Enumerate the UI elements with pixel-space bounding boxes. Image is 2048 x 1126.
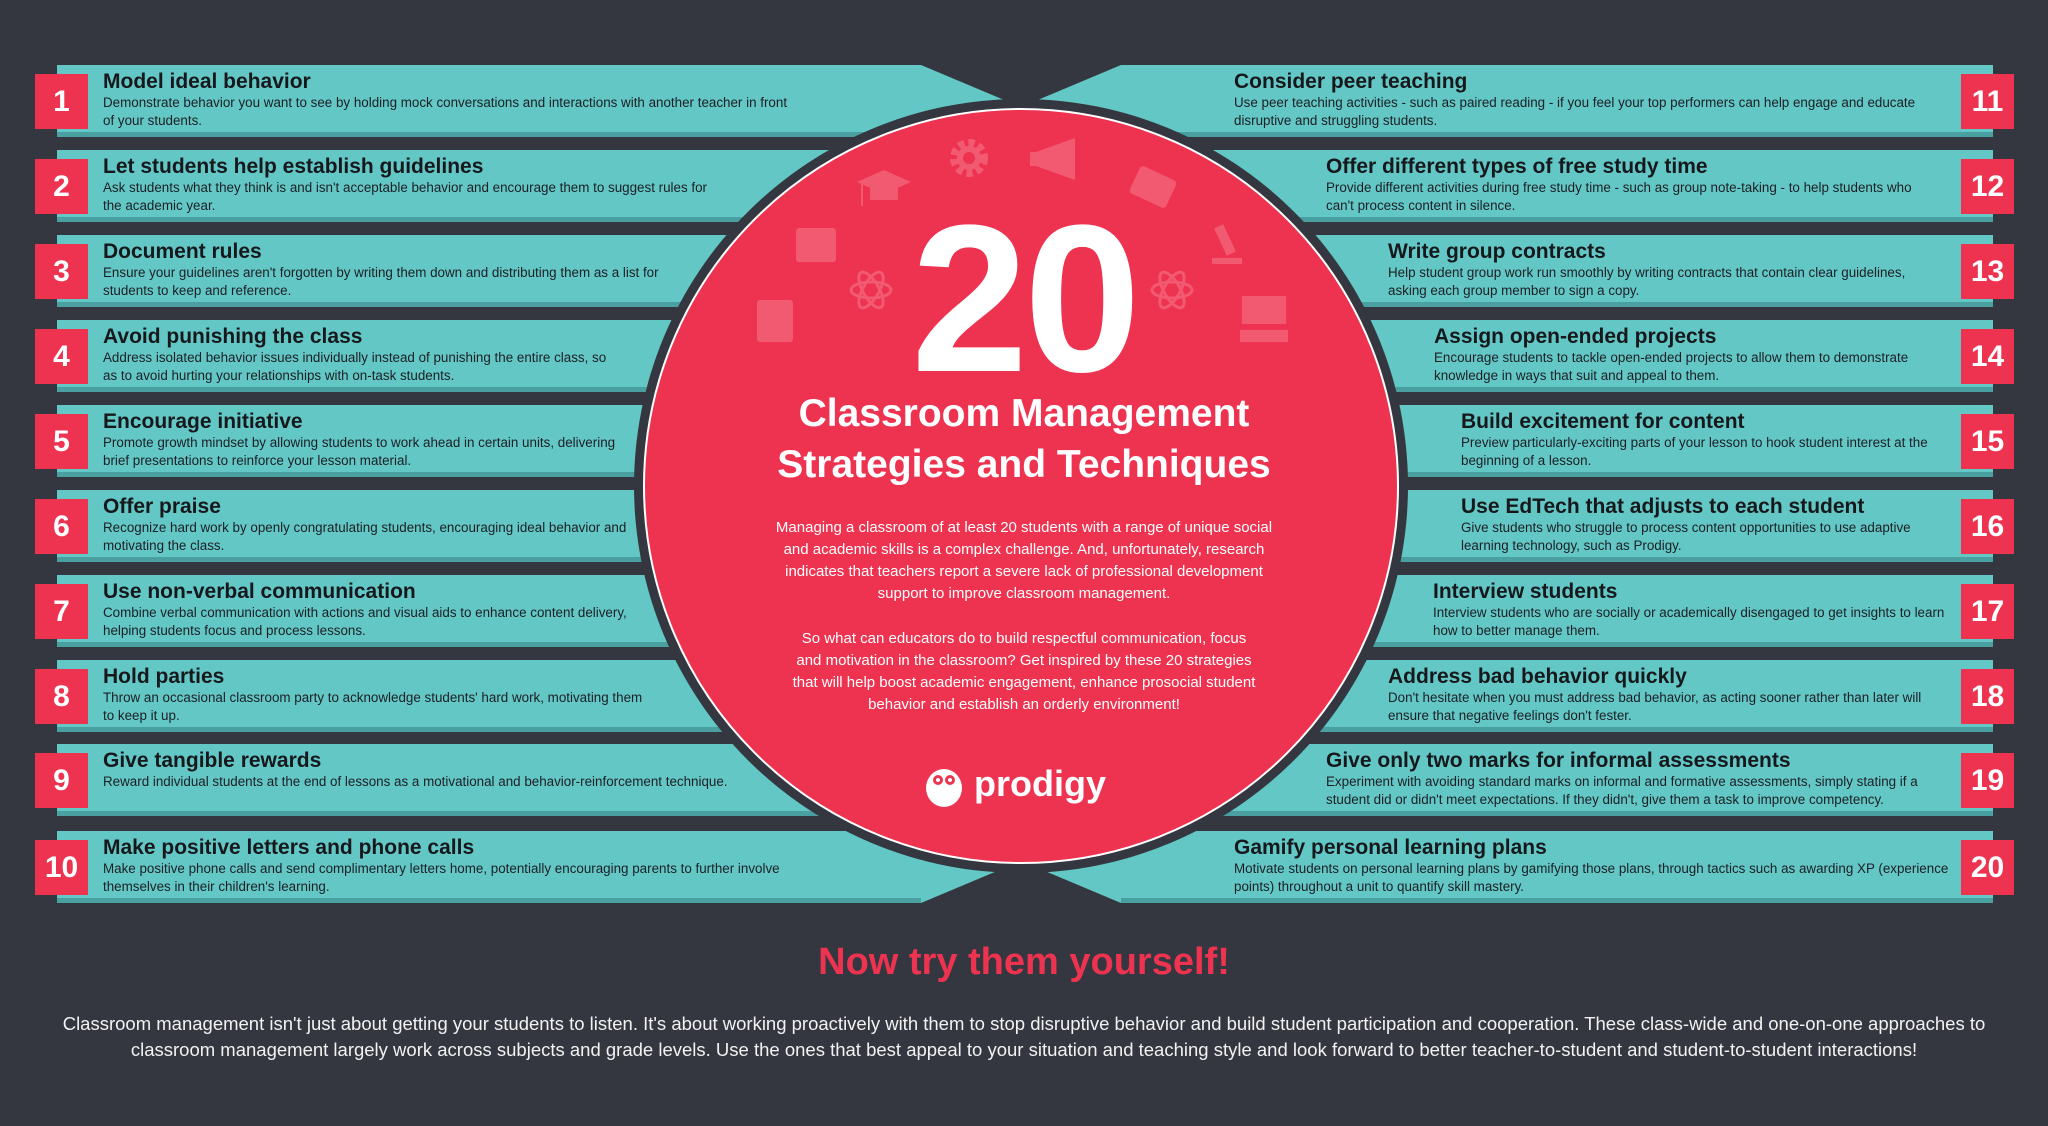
left item 6 <box>35 495 626 554</box>
right item 19 <box>1326 749 2014 808</box>
right item 12: Offer different types of free study time <box>1326 155 1708 178</box>
right item 14: Encourage students to tackle open-ended projects to allow them to demonstrate <box>1434 350 1908 365</box>
left item 8 <box>35 665 642 724</box>
right item 13: Write group contracts <box>1388 240 1606 263</box>
right item 13: Help student group work run smoothly by writing contracts that contain clear guidelines, <box>1388 265 1905 280</box>
right item 15: beginning of a lesson. <box>1461 453 1591 468</box>
right item 15: 15 <box>1971 425 2004 458</box>
left item 2: 2 <box>53 170 70 203</box>
left item 8: 8 <box>53 680 70 713</box>
left item 10 <box>35 836 780 895</box>
right item 17: Interview students who are socially or academically disengaged to get insights to learn <box>1433 605 1944 620</box>
center heading <box>777 392 1271 486</box>
intro paragraph 2: So what can educators do to build respectful communication, focus <box>802 630 1246 647</box>
right item 16: 16 <box>1971 510 2004 543</box>
intro paragraph 1: Managing a classroom of at least 20 students with a range of unique social <box>776 519 1272 536</box>
bottom paragraph: Classroom management isn't just about getting your students to listen. It's about working proactively with them to stop disruptive behavior and build student participation and cooperation. These class-wide and one-on-one approaches to <box>63 1013 1985 1034</box>
right item 11: Consider peer teaching <box>1234 70 1467 93</box>
left item 7: Use non-verbal communication <box>103 580 416 603</box>
right item 12: 12 <box>1971 170 2004 203</box>
right item 11 <box>1234 70 2014 129</box>
right item 11: disruptive and struggling students. <box>1234 113 1437 128</box>
intro paragraph 1 <box>776 519 1272 602</box>
icon: atom right <box>1152 269 1192 311</box>
left item 10: Make positive phone calls and send complimentary letters home, potentially encouraging parents to further involve <box>103 861 780 876</box>
right item 18: Don't hesitate when you must address bad behavior, as acting sooner rather than later will <box>1388 690 1921 705</box>
left item 1 <box>35 70 787 129</box>
left item 9 <box>35 749 728 808</box>
right item 18: Address bad behavior quickly <box>1388 665 1687 688</box>
left item 3 <box>35 240 659 299</box>
right item 16 <box>1461 495 2014 554</box>
logo: prodigy: prodigy <box>974 763 1106 804</box>
icon: microscope <box>1212 224 1242 264</box>
left item 7: 7 <box>53 595 70 628</box>
left item 1: Demonstrate behavior you want to see by holding mock conversations and interactions with another teacher in front <box>103 95 787 110</box>
right item 11: 11 <box>1972 85 2003 118</box>
left item 8: to keep it up. <box>103 708 180 723</box>
left item 4 <box>35 325 606 384</box>
left item 10: 10 <box>45 851 78 884</box>
intro paragraph 2: and motivation in the classroom? Get inspired by these 20 strategies <box>796 652 1252 669</box>
icon: notebook <box>757 300 793 342</box>
right item 13: asking each group member to sign a copy. <box>1388 283 1639 298</box>
left item 5: Promote growth mindset by allowing students to work ahead in certain units, delivering <box>103 435 615 450</box>
left item 5: Encourage initiative <box>103 410 303 433</box>
right item 20: points) throughout a unit to quantify skill mastery. <box>1234 879 1524 894</box>
right item 17: Interview students <box>1433 580 1617 603</box>
intro paragraph 1: and academic skills is a complex challenge. And, unfortunately, research <box>784 541 1264 558</box>
left item 2: the academic year. <box>103 198 215 213</box>
left item 4: 4 <box>53 340 70 373</box>
logo: prodigy <box>926 763 1106 807</box>
center title: 20: 20 <box>911 181 1137 416</box>
left item 2: Ask students what they think is and isn't acceptable behavior and encourage them to suggest rules for <box>103 180 707 195</box>
right item 18: ensure that negative feelings don't fester. <box>1388 708 1632 723</box>
left item 4: Address isolated behavior issues individually instead of punishing the entire class, so <box>103 350 606 365</box>
left item 8: Hold parties <box>103 665 224 688</box>
left item 5 <box>35 410 615 469</box>
right item 14: 14 <box>1971 340 2004 373</box>
left item 1: Model ideal behavior <box>103 70 311 93</box>
left item 9: 9 <box>53 764 70 797</box>
right item 17: how to better manage them. <box>1433 623 1600 638</box>
left item 5: 5 <box>53 425 70 458</box>
left item 9: Give tangible rewards <box>103 749 321 772</box>
left item 6: Offer praise <box>103 495 221 518</box>
left item 1: of your students. <box>103 113 202 128</box>
right item 12: can't process content in silence. <box>1326 198 1515 213</box>
right item 13: 13 <box>1971 255 2004 288</box>
left item 7: helping students focus and process lessons. <box>103 623 366 638</box>
right item 19: 19 <box>1971 764 2004 797</box>
right item 15 <box>1461 410 2014 469</box>
center heading: Strategies and Techniques <box>777 443 1271 486</box>
right item 17: 17 <box>1971 595 2004 628</box>
right item 17 <box>1433 580 2014 639</box>
left item 8: Throw an occasional classroom party to acknowledge students' hard work, motivating them <box>103 690 642 705</box>
right item 12 <box>1326 155 2014 214</box>
right item 12: Provide different activities during free study time - such as group note-taking - to help students who <box>1326 180 1912 195</box>
left item 3: 3 <box>53 255 70 288</box>
left item 3: Document rules <box>103 240 262 263</box>
left item 9: Reward individual students at the end of lessons as a motivational and behavior-reinforcement technique. <box>103 774 728 789</box>
left item 2 <box>35 155 707 214</box>
right item 16: Give students who struggle to process content opportunities to use adaptive <box>1461 520 1911 535</box>
right item 14: knowledge in ways that suit and appeal to them. <box>1434 368 1719 383</box>
left item 10: themselves in their children's learning. <box>103 879 330 894</box>
left item 3: students to keep and reference. <box>103 283 291 298</box>
right item 20: 20 <box>1971 851 2004 884</box>
icon: megaphone <box>1030 138 1075 180</box>
right item 16: learning technology, such as Prodigy. <box>1461 538 1682 553</box>
icon: atom left <box>851 269 891 311</box>
right item 14: Assign open-ended projects <box>1434 325 1716 348</box>
intro paragraph 2: behavior and establish an orderly environment! <box>868 696 1180 713</box>
left item 6: motivating the class. <box>103 538 224 553</box>
right item 19: Experiment with avoiding standard marks on informal and formative assessments, simply stating if a <box>1326 774 1918 789</box>
right item 20: Gamify personal learning plans <box>1234 836 1547 859</box>
left item 6: Recognize hard work by openly congratulating students, encouraging ideal behavior and <box>103 520 626 535</box>
icon: gear <box>954 143 984 173</box>
right item 11: Use peer teaching activities - such as paired reading - if you feel your top performers can help engage and educate <box>1234 95 1915 110</box>
bottom paragraph: classroom management largely work across subjects and grade levels. Use the ones that best appeal to your situation and teaching style and look forward to better teacher-to-student and student-to-student interactions! <box>131 1039 1917 1060</box>
intro paragraph 1: indicates that teachers report a severe lack of professional development <box>785 563 1263 580</box>
right item 16: Use EdTech that adjusts to each student <box>1461 495 1864 518</box>
right item 14 <box>1434 325 2014 384</box>
right item 18: 18 <box>1971 680 2004 713</box>
icon: graduation cap <box>857 170 911 206</box>
left item 2: Let students help establish guidelines <box>103 155 483 178</box>
left item 1: 1 <box>53 85 70 118</box>
left item 4: Avoid punishing the class <box>103 325 362 348</box>
right item 18 <box>1388 665 2014 724</box>
right item 20: Motivate students on personal learning plans by gamifying those plans, through tactics such as awarding XP (experience <box>1234 861 1948 876</box>
left item 6: 6 <box>53 510 70 543</box>
right item 19: student did or didn't meet expectations. If they didn't, give them a task to improve competency. <box>1326 792 1884 807</box>
intro paragraph 2 <box>792 630 1256 713</box>
bottom heading: Now try them yourself! <box>818 941 1230 983</box>
icon: book <box>796 228 836 262</box>
left item 7 <box>35 580 627 639</box>
left item 5: brief presentations to reinforce your lesson material. <box>103 453 411 468</box>
icon: sharpener <box>1129 165 1177 209</box>
icon: teacher board <box>1240 296 1288 342</box>
intro paragraph 1: support to improve classroom management. <box>878 585 1170 602</box>
left item 4: as to avoid hurting your relationships with on-task students. <box>103 368 454 383</box>
right item 19: Give only two marks for informal assessments <box>1326 749 1791 772</box>
right item 20 <box>1234 836 2014 895</box>
left item 7: Combine verbal communication with actions and visual aids to enhance content delivery, <box>103 605 627 620</box>
right item 15: Preview particularly-exciting parts of your lesson to hook student interest at the <box>1461 435 1928 450</box>
right item 15: Build excitement for content <box>1461 410 1745 433</box>
left item 3: Ensure your guidelines aren't forgotten by writing them down and distributing them as a list for <box>103 265 659 280</box>
left item 10: Make positive letters and phone calls <box>103 836 474 859</box>
bottom paragraph <box>63 1013 1985 1060</box>
center heading: Classroom Management <box>799 392 1249 435</box>
right item 13 <box>1388 240 2014 299</box>
intro paragraph 2: that will help boost academic engagement, enhance prosocial student <box>793 674 1255 691</box>
